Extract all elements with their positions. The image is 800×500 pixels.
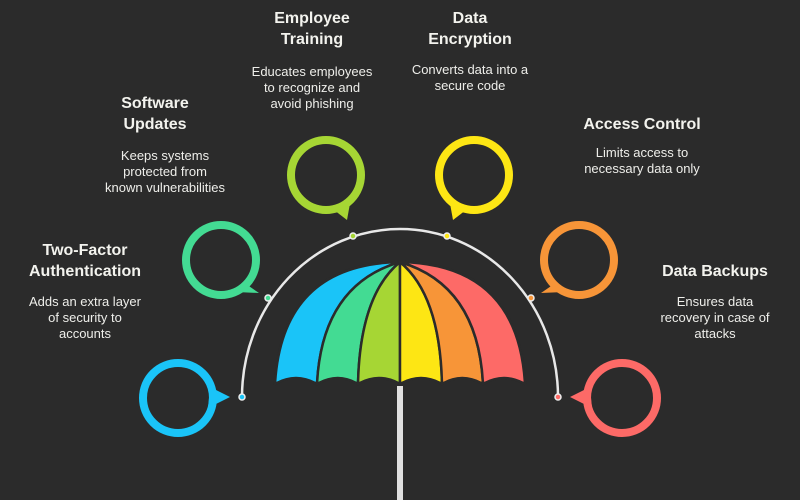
text: Updates xyxy=(123,116,187,133)
text: recovery in case of xyxy=(660,310,770,325)
handle xyxy=(397,386,403,500)
text: Encryption xyxy=(428,31,512,48)
canopy xyxy=(275,262,525,384)
text: accounts xyxy=(59,326,111,341)
text: Limits access to xyxy=(596,145,688,160)
ring: blue xyxy=(143,363,230,433)
text: to recognize and xyxy=(264,80,360,95)
text: known vulnerabilities xyxy=(105,180,225,195)
text: of security to xyxy=(48,310,122,325)
text: Two-Factor Authentication xyxy=(29,242,141,341)
text: Two-Factor xyxy=(42,242,128,259)
text: protected from xyxy=(123,164,207,179)
ring: red xyxy=(570,363,657,433)
text: Data Encryption xyxy=(412,10,528,93)
text: necessary data only xyxy=(584,161,700,176)
text: Access Control xyxy=(583,116,701,176)
text: Data xyxy=(453,10,487,27)
text: Ensures data xyxy=(677,294,753,309)
text: Software Updates xyxy=(105,95,225,195)
text: Authentication xyxy=(29,263,141,280)
text: avoid phishing xyxy=(270,96,354,111)
ring: orange xyxy=(541,225,614,295)
text: Data Backups xyxy=(660,263,770,341)
text: attacks xyxy=(694,326,736,341)
ring: lime xyxy=(291,140,361,220)
text: Keeps systems xyxy=(121,148,209,163)
text: secure code xyxy=(435,78,505,93)
text: Adds an extra layer xyxy=(29,294,141,309)
ring: yellow xyxy=(439,140,509,220)
text: Converts data into a xyxy=(412,62,528,77)
text: Software xyxy=(121,95,189,112)
text: Educates employees xyxy=(252,64,372,79)
text: Training xyxy=(281,31,343,48)
text: Access Control xyxy=(583,116,701,133)
text: Employee xyxy=(274,10,350,27)
text: Data Backups xyxy=(662,263,768,280)
arc dots xyxy=(239,233,561,400)
text: Employee Training xyxy=(252,10,372,111)
ring: green xyxy=(186,225,259,295)
arc xyxy=(242,229,558,397)
